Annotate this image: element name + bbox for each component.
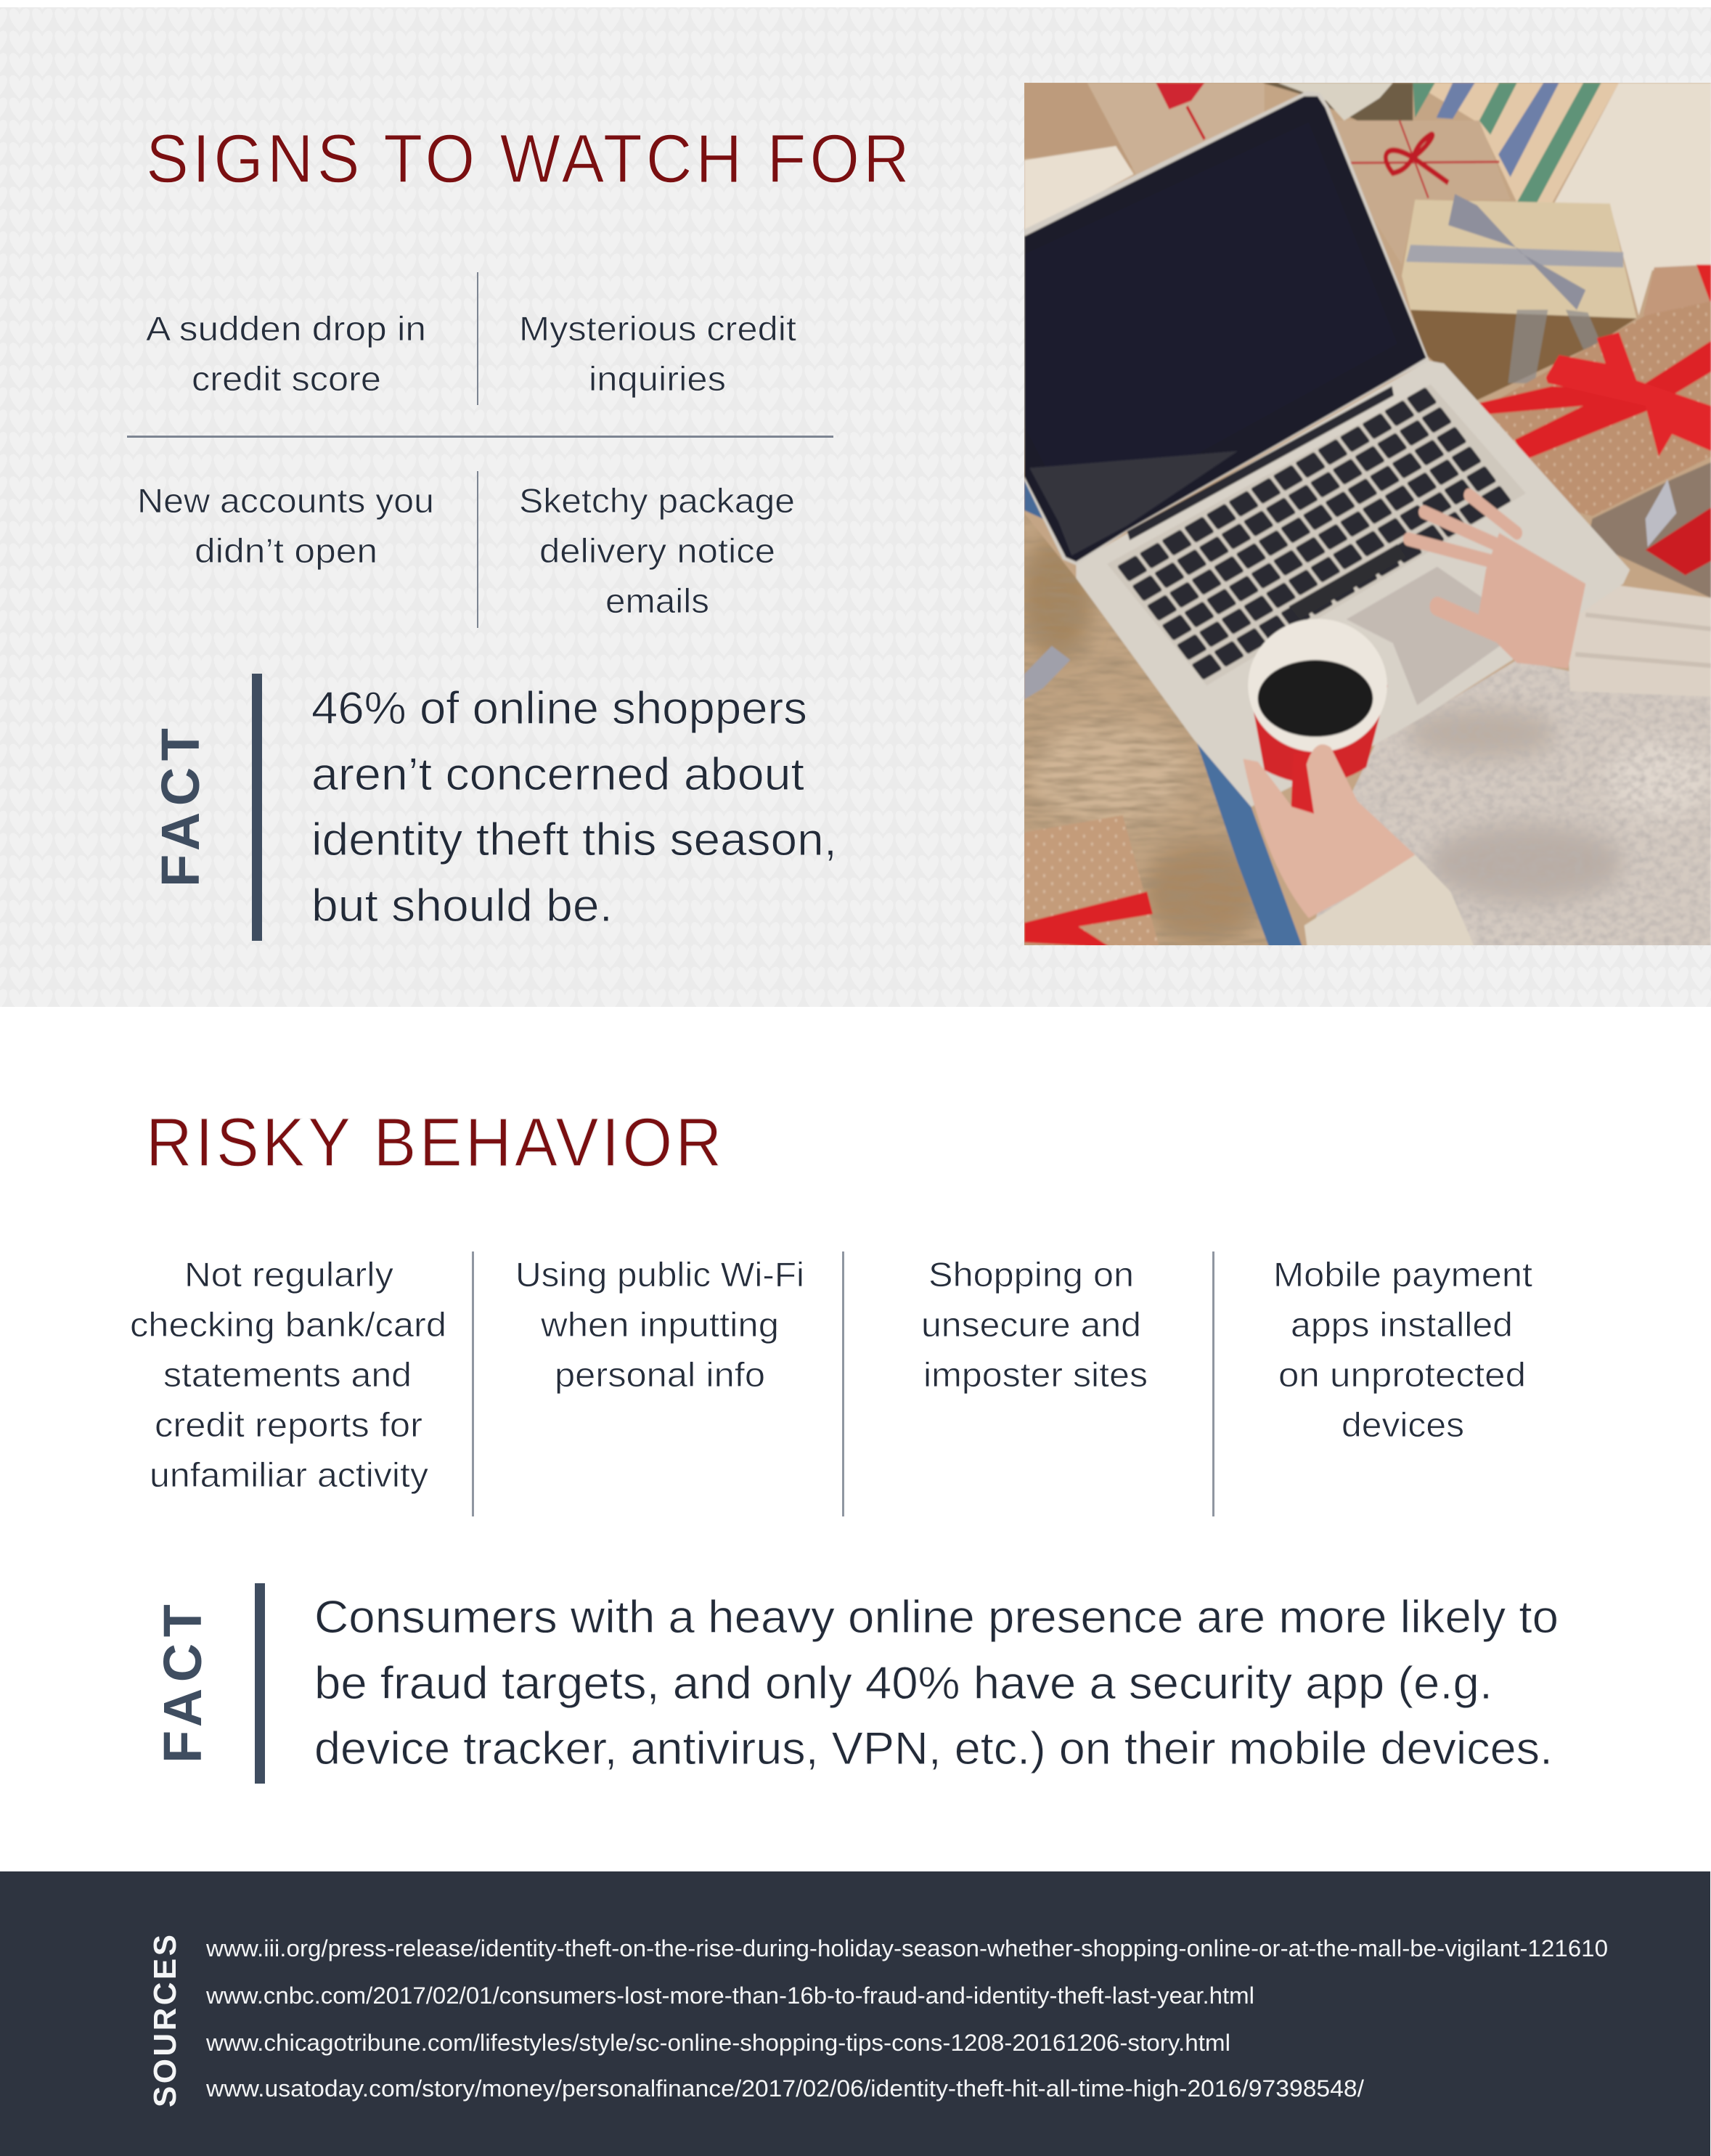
fur (1024, 513, 1304, 958)
heading: risky behavior: RISKY BEHAVIOR (146, 1104, 722, 1181)
source links: www.iii.org/press-release/identity-theft-on-the-rise-during-holiday-season-whether-shopping-online-or-at-the-mall-be-vigilant-121610 (205, 1935, 1608, 1961)
behavior: not regularly checking: checking bank/card (130, 1305, 446, 1344)
sources label: SOURCES (147, 1935, 183, 2107)
source links: www.cnbc.com/2017/02/01/consumers-lost-more-than-16b-to-fraud-and-identity-theft-last-year.html (205, 1983, 1254, 2009)
fact text: aren’t concerned about (311, 749, 805, 800)
sign: mysterious credit inquiries (519, 309, 796, 398)
sign: sketchy package delivery emails (519, 481, 795, 620)
fact text: Consumers with a heavy online presence are more likely to (314, 1592, 1559, 1643)
fact text: 46% of online shoppers (311, 683, 807, 734)
behavior: not regularly checking: statements and (163, 1355, 412, 1394)
behavior: not regularly checking: Not regularly (184, 1255, 394, 1294)
jeans (1196, 743, 1302, 945)
signs grid (127, 272, 833, 628)
sign: sudden drop in credit score: credit score (192, 359, 381, 398)
fact text: device tracker, antivirus, VPN, etc.) on their mobile devices. (314, 1723, 1553, 1774)
behavior: unsecure sites: Shopping on (928, 1255, 1134, 1294)
fact bar (252, 674, 262, 941)
sign: sudden drop in credit score: A sudden drop in (146, 309, 426, 348)
box with grey ribbon (1410, 310, 1636, 400)
fact text: be fraud targets, and only 40% have a security app (e.g. (314, 1658, 1492, 1709)
fact label: FACT (150, 728, 211, 887)
behavior: unsecure sites (921, 1255, 1148, 1394)
box with thin red string (1357, 121, 1482, 128)
photo: laptop with gifts and coffee (1024, 83, 1711, 945)
heading: signs to watch for: SIGNS TO WATCH FOR (146, 121, 910, 197)
fact block: 46% of online shoppers (150, 674, 837, 941)
sign: sketchy package delivery emails: delivery notice (539, 531, 775, 570)
keyboard (1114, 384, 1515, 683)
sign: new accounts (137, 481, 434, 570)
behavior: mobile payment apps: on unprotected (1278, 1355, 1526, 1394)
hand on laptop (1408, 495, 1585, 669)
behavior: not regularly checking: unfamiliar activity (150, 1455, 429, 1494)
coffee cup (1249, 685, 1387, 783)
sign: mysterious credit inquiries: Mysterious credit (519, 309, 796, 348)
bottom right dark + red gift (1588, 462, 1711, 598)
behavior: mobile payment apps: apps installed (1291, 1305, 1513, 1344)
sign: sketchy package delivery emails: Sketchy package (519, 481, 795, 520)
hand holding cup (1243, 744, 1415, 918)
fact block: heavy online presence (152, 1583, 1559, 1784)
panel: sources footer (0, 1871, 1710, 2156)
gifts top (1024, 83, 1136, 168)
right backdrop (1555, 83, 1711, 316)
behavior: unsecure sites: unsecure and (921, 1305, 1141, 1344)
trackpad (1347, 567, 1503, 705)
sweater (1304, 660, 1711, 958)
screen (1021, 91, 1429, 565)
sign: new accounts: New accounts you (137, 481, 434, 520)
behavior: mobile payment apps (1273, 1255, 1532, 1444)
behavior: public wi-fi (515, 1255, 804, 1394)
behavior: public wi-fi: personal info (555, 1355, 765, 1394)
behavior: public wi-fi: when inputting (540, 1305, 779, 1344)
fact text (311, 683, 837, 931)
source links: www.chicagotribune.com/lifestyles/style/sc-online-shopping-tips-cons-1208-20161206-story.html (205, 2030, 1230, 2056)
striped paper (1413, 83, 1619, 203)
panel: risky behavior (130, 1104, 1559, 1784)
polka box with red bow (1643, 265, 1711, 316)
sign: sketchy package delivery emails: emails (605, 581, 709, 620)
behavior: mobile payment apps: Mobile payment (1273, 1255, 1532, 1294)
sleeve cuff (1304, 855, 1479, 958)
behavior: unsecure sites: imposter sites (923, 1355, 1148, 1394)
sign: new accounts: didn’t open (195, 531, 377, 570)
fact text: identity theft this season, (311, 814, 837, 865)
fact text (314, 1592, 1559, 1774)
behavior: mobile payment apps: devices (1342, 1405, 1464, 1444)
knit sweater background (0, 7, 1711, 1007)
source links: www.usatoday.com/story/money/personalfinance/2017/02/06/identity-theft-hit-all-time-high-2016/97398548/ (205, 2075, 1364, 2102)
gift bottom left (1024, 815, 1162, 958)
fact text: but should be. (311, 881, 613, 931)
behavior: not regularly checking (130, 1255, 446, 1494)
sign: mysterious credit inquiries: inquiries (589, 359, 726, 398)
behavior: not regularly checking: credit reports for (155, 1405, 422, 1444)
fact bar (255, 1583, 265, 1784)
sign: sudden drop in credit score (146, 309, 426, 398)
panel: signs to watch for (0, 7, 1711, 1007)
laptop base (1076, 361, 1630, 807)
source links (205, 1935, 1608, 2102)
fact label: FACT (152, 1604, 213, 1763)
behavior: public wi-fi: Using public Wi-Fi (515, 1255, 804, 1294)
